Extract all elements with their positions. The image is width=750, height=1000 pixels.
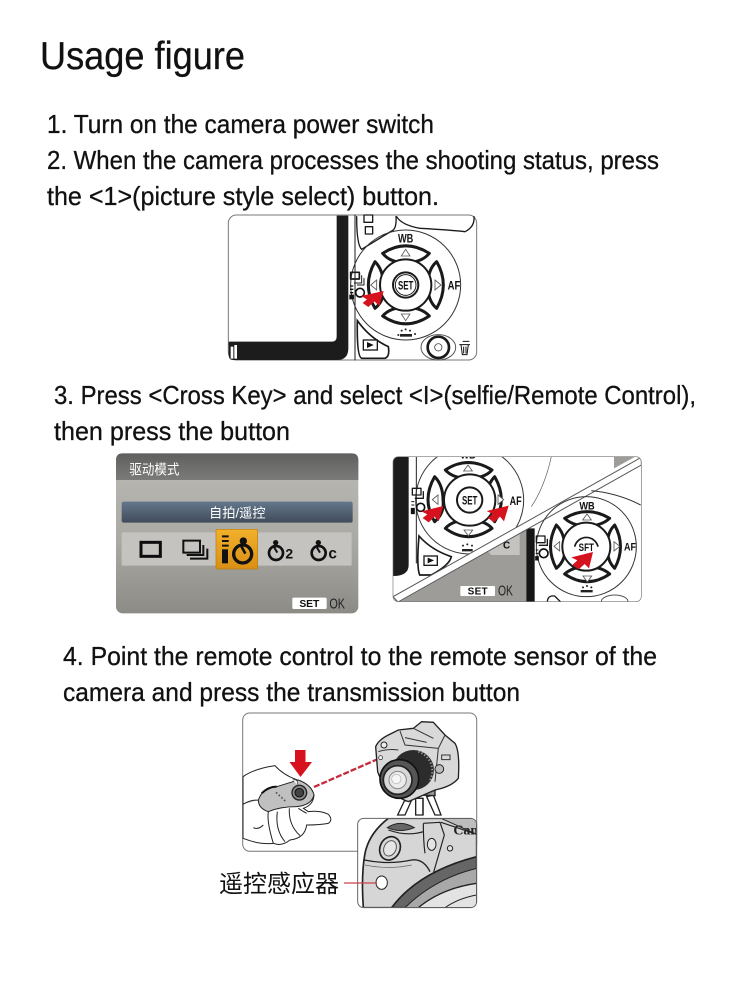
icon: continuous shot xyxy=(183,541,207,559)
red dashed beam xyxy=(314,759,378,787)
lens close-up xyxy=(392,857,477,908)
AF label: AF xyxy=(448,278,460,292)
text block: step 4: 4. Point the remote control to the remote sensor of the xyxy=(63,641,657,671)
icon: 2 second timer: 2 xyxy=(285,545,293,561)
text block: steps 1 and 2: the <1>(picture style select) button. xyxy=(47,181,439,211)
lower gray LCD part xyxy=(400,528,535,602)
lower gray LCD part: OK xyxy=(498,584,513,600)
text block: steps 1 and 2: 1. Turn on the camera power switch xyxy=(47,109,434,139)
icon row xyxy=(122,532,352,566)
screen frame xyxy=(229,216,348,360)
top button xyxy=(383,246,429,263)
sensor circle xyxy=(376,876,387,889)
upper left part: AF xyxy=(510,494,522,508)
upper left part: SET xyxy=(462,494,478,508)
upper left part xyxy=(393,456,634,576)
text block: step 4: camera and press the transmission button xyxy=(63,677,520,707)
icon: selected self-timer remote xyxy=(216,529,258,569)
panel: camera back with arrow on left cross key: SET xyxy=(398,278,414,292)
bottom button xyxy=(383,307,429,324)
panel: drive mode LCD menu xyxy=(116,453,358,613)
selected mode bar xyxy=(122,502,353,523)
SET OK label: SET xyxy=(299,599,320,610)
right button xyxy=(428,262,443,308)
icon: continuous timer xyxy=(312,540,337,562)
SET OK label: OK xyxy=(329,597,345,613)
lower right part: WB xyxy=(579,500,595,512)
menu header xyxy=(116,453,358,480)
panel: cross key press diagram xyxy=(393,446,641,608)
flower icon xyxy=(397,328,416,337)
selected mode bar: 自拍/遥控 xyxy=(209,506,266,521)
hand holding remote xyxy=(243,766,331,844)
text block: step 3 xyxy=(54,380,696,446)
lens xyxy=(393,750,434,790)
camera xyxy=(376,722,459,802)
camera body xyxy=(362,818,477,908)
lower right part: SFT xyxy=(579,542,594,554)
text block: step 3: then press the button xyxy=(54,416,290,446)
text block: step 4 xyxy=(63,641,657,707)
lower gray LCD part: C xyxy=(503,540,510,551)
text block: steps 1 and 2: 2. When the camera processes the shooting status, press xyxy=(47,145,659,175)
text block: step 3: 3. Press <Cross Key> and select <I>(selfie/Remote Control), xyxy=(54,380,696,410)
centre SET button xyxy=(380,259,431,311)
dial ring xyxy=(351,230,461,340)
menu header: 驱动模式 xyxy=(129,461,179,477)
icon: single shot xyxy=(141,542,160,556)
label: remote sensor: 遥控感应器 xyxy=(219,871,339,898)
WB label: WB xyxy=(398,231,414,245)
tripod xyxy=(398,789,441,815)
red arrow xyxy=(361,291,384,307)
round button and trash icon xyxy=(421,335,470,360)
play button xyxy=(357,321,389,358)
white diagonal divider xyxy=(393,457,641,602)
icon: continuous timer: c xyxy=(328,545,337,562)
icon: 2 second timer xyxy=(269,540,293,561)
text block: steps 1 and 2 xyxy=(47,109,659,211)
title: Usage figure xyxy=(40,35,245,78)
red press arrow xyxy=(290,750,312,777)
drive icon xyxy=(350,272,364,299)
SET OK label xyxy=(292,597,345,613)
lower gray LCD part: SET xyxy=(468,587,488,598)
lower right part: AF xyxy=(624,542,636,554)
left button xyxy=(368,262,384,308)
panel: remote control aimed at camera xyxy=(243,713,477,851)
panel: remote sensor close-up: Can xyxy=(453,823,478,838)
panel: camera back with arrow on left cross key xyxy=(228,215,477,360)
panel: remote sensor close-up xyxy=(358,818,478,908)
upper left part: WB xyxy=(460,450,476,462)
lower right part xyxy=(536,491,641,608)
